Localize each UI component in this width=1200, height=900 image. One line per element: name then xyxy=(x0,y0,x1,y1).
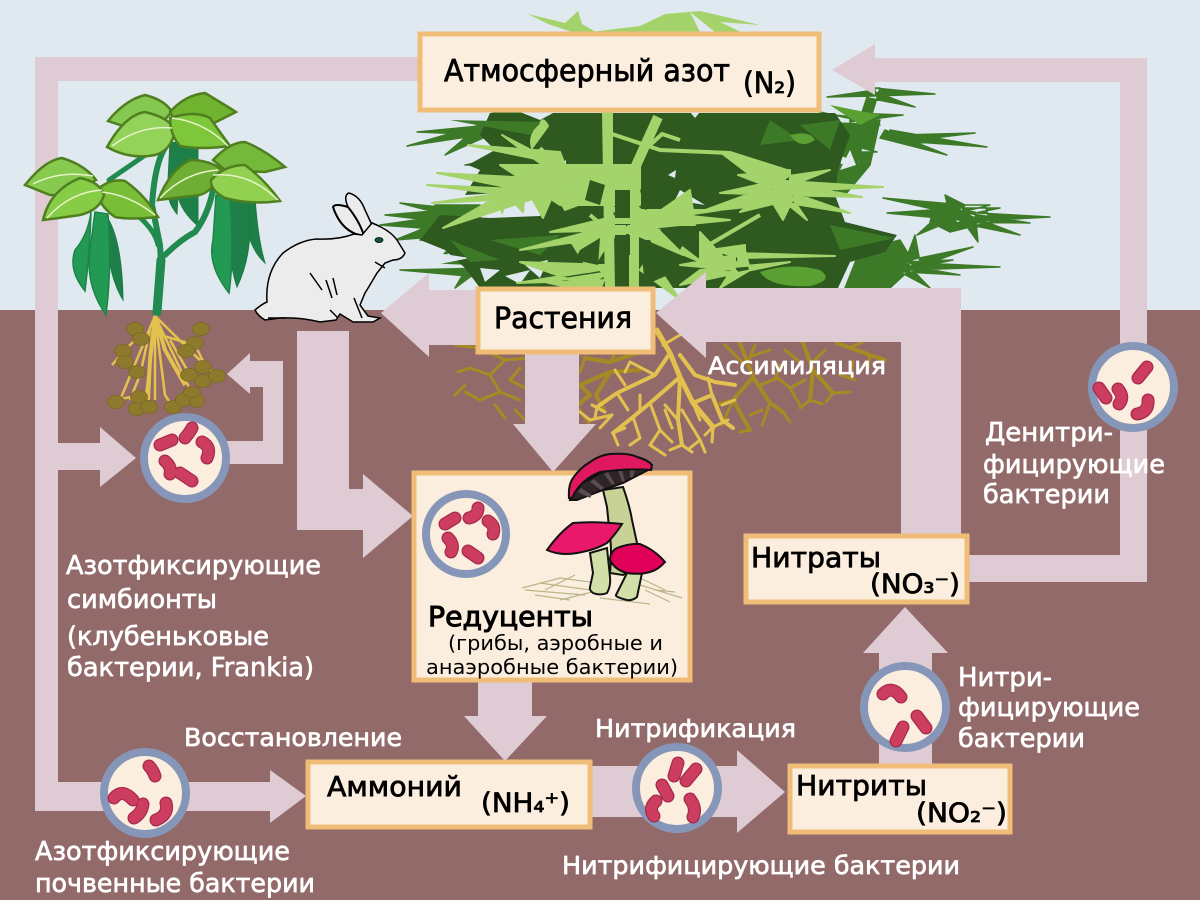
box: ammonium: Аммоний xyxy=(327,770,462,803)
box: nitrites: (NO₂⁻) xyxy=(916,798,1007,829)
arrow: ammonium to nitrites xyxy=(590,750,785,833)
arrow: denitrification to atmosphere xyxy=(832,44,1147,582)
arrow: assimilation nitrates to plants xyxy=(656,272,961,540)
label: nitrifying bacteria right: фицирующие xyxy=(958,693,1140,723)
icon: soil bacteria circle xyxy=(104,752,186,834)
panel: decomposers: Редуценты xyxy=(428,600,593,633)
arrow: decomposers to ammonium xyxy=(464,680,547,761)
arrow: atmosphere down the left side to soil bacteria xyxy=(35,57,420,823)
illustration: tree root overlapping arrow tip xyxy=(657,332,668,350)
illustration: tree crown xyxy=(380,11,1050,300)
sky background xyxy=(0,0,1200,312)
illustration: tree roots xyxy=(455,330,885,455)
label: denitrifying bacteria: фицирующие xyxy=(983,450,1165,480)
arrow: animals to decomposers xyxy=(297,331,413,558)
label: nitrifying bacteria right: бактерии xyxy=(958,724,1085,754)
label: denitrifying bacteria: бактерии xyxy=(983,480,1110,510)
label: nitrifying bacteria right: Нитри- xyxy=(958,663,1052,693)
arrow: nitrites to nitrates xyxy=(863,607,948,766)
label: nitrifying bacteria right xyxy=(958,663,1140,754)
label: symbiotic nitrogen fixers: симбионты xyxy=(67,585,217,615)
label: symbiotic nitrogen fixers: (клубеньковые xyxy=(67,622,269,652)
panel: decomposers: анаэробные бактерии) xyxy=(426,655,678,679)
box: nitrites: Нитриты xyxy=(796,769,927,802)
label: symbiotic nitrogen fixers: Азотфиксирующие xyxy=(66,551,321,581)
label: symbiotic nitrogen fixers: бактерии, Frankia) xyxy=(67,653,314,683)
illustration: rabbit xyxy=(255,193,405,322)
box: nitrates xyxy=(746,536,967,602)
label: soil nitrogen fixers xyxy=(35,837,315,899)
box: nitrites xyxy=(790,766,1010,832)
soil background xyxy=(0,310,1200,900)
label: nitrification: Нитрификация xyxy=(595,714,796,743)
box: nitrates: Нитраты xyxy=(751,541,881,574)
icon: mushroom mycelium xyxy=(522,575,682,604)
box: atmospheric nitrogen: (N₂) xyxy=(743,66,796,100)
panel: decomposers xyxy=(414,454,690,680)
icon: denitrifying bacteria circle xyxy=(1092,346,1174,428)
arrow: plants to animals xyxy=(381,273,480,357)
label: symbiotic nitrogen fixers xyxy=(66,551,321,683)
box: atmospheric nitrogen: Атмосферный азот xyxy=(444,54,730,89)
box: plants: Растения xyxy=(494,301,632,335)
icon: nitrification bacteria circle xyxy=(636,747,718,829)
icon: nitrifying bacteria circle xyxy=(864,666,946,748)
label: assimilation: Ассимиляция xyxy=(708,352,886,380)
box: atmospheric nitrogen xyxy=(420,34,819,110)
arrow: symbionts to plant roots xyxy=(225,353,283,464)
label: denitrifying bacteria: Денитри- xyxy=(985,418,1113,448)
label: denitrifying bacteria xyxy=(983,418,1165,510)
label: nitrifying bacteria bottom: Нитрифицирующие бактерии xyxy=(562,851,960,880)
icon: mushrooms xyxy=(547,454,665,600)
label: soil nitrogen fixers: почвенные бактерии xyxy=(35,869,315,899)
illustration: bean plant xyxy=(25,93,285,315)
box: ammonium xyxy=(308,762,590,827)
icon: symbiotic bacteria circle xyxy=(144,417,226,499)
panel: decomposers: (грибы, аэробные и xyxy=(448,631,663,655)
label: soil nitrogen fixers: Азотфиксирующие xyxy=(35,837,290,867)
icon: decomposer bacteria xyxy=(426,494,506,574)
box: nitrates: (NO₃⁻) xyxy=(870,569,960,600)
arrow: plants to decomposers xyxy=(513,350,596,472)
box: ammonium: (NH₄⁺) xyxy=(481,788,570,819)
label: reduction: Восстановление xyxy=(184,723,402,752)
box: plants xyxy=(478,289,653,352)
illustration: bean roots and nodules xyxy=(108,316,226,416)
